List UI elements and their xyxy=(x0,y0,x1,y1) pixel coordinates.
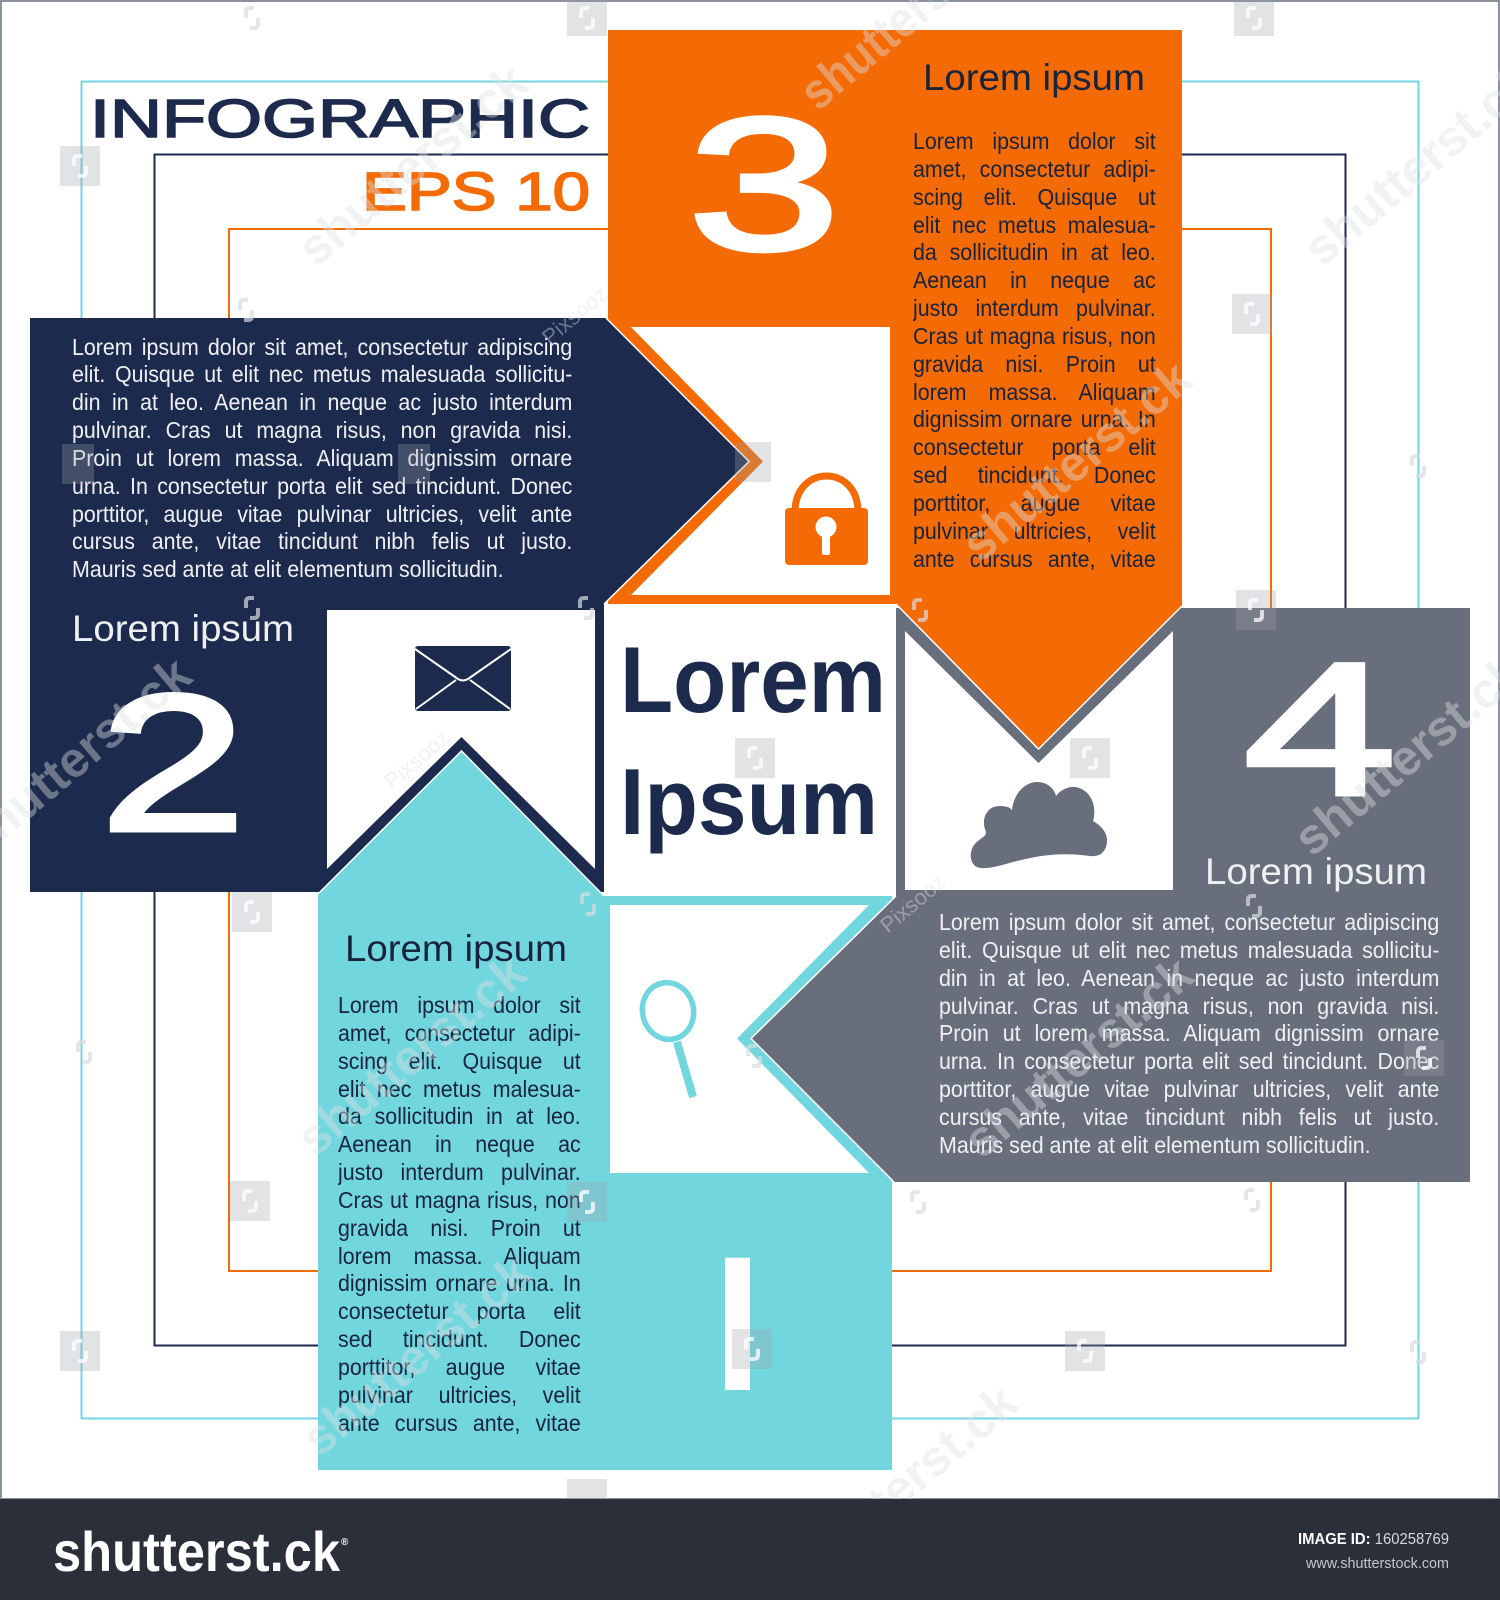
footer url: www.shutterstock.com xyxy=(1305,1555,1449,1572)
footer logo: shutterst.ck xyxy=(53,1520,341,1583)
text block: step 1: dignissim ornare urna. In xyxy=(338,1270,581,1296)
number 1: 1 xyxy=(679,1219,785,1431)
text block: step 3: justo interdum pulvinar. xyxy=(913,295,1156,321)
text block: step 3: scing elit. Quisque ut xyxy=(913,184,1156,210)
stock watermark overlay: shutterst.ck xyxy=(951,349,1202,572)
title xyxy=(90,89,590,222)
text block: step 1: porttitor, augue vitae xyxy=(338,1354,581,1380)
text block: step 3: ante cursus ante, vitae xyxy=(913,546,1156,572)
text block: step 3: elit nec metus malesua- xyxy=(913,212,1156,238)
text block: step 1: justo interdum pulvinar. xyxy=(338,1159,581,1185)
text block: step 1: amet, consectetur adipi- xyxy=(338,1020,581,1046)
panel: cyan step 1 body xyxy=(318,896,892,1470)
text block: step 2: porttitor, augue vitae pulvinar ultricies, velit ante xyxy=(72,501,572,527)
heading: centre title: Ipsum xyxy=(620,749,878,854)
heading: centre title xyxy=(620,627,886,854)
text block: step 3: Aenean in neque ac xyxy=(913,267,1156,293)
panel: orange step 3 body xyxy=(608,30,1182,604)
text block: step 2 xyxy=(72,334,572,582)
text block: step 1: ante cursus ante, vitae xyxy=(338,1410,581,1436)
text block: step 4: porttitor, augue vitae pulvinar ultricies, velit ante xyxy=(938,1076,1439,1102)
number 3: 3 xyxy=(688,79,840,289)
text block: step 1: elit nec metus malesua- xyxy=(338,1076,581,1102)
text block: step 4: pulvinar. Cras ut magna risus, non gravida nisi. xyxy=(938,993,1439,1019)
number 2: 2 xyxy=(100,655,246,872)
number 4: 4 xyxy=(1244,624,1396,834)
text block: step 2: din in at leo. Aenean in neque ac justo interdum xyxy=(72,389,572,415)
text block: step 3: Cras ut magna risus, non xyxy=(913,323,1156,349)
text block: step 2: Lorem ipsum dolor sit amet, consectetur adipiscing xyxy=(72,334,572,360)
text block: step 1: pulvinar ultricies, velit xyxy=(338,1382,581,1408)
subtitle: EPS 10 xyxy=(362,162,590,222)
text block: step 4: Mauris sed ante at elit elementum sollicitudin. xyxy=(938,1132,1370,1158)
text block: step 3: lorem massa. Aliquam xyxy=(913,379,1156,405)
text block: step 1: consectetur porta elit xyxy=(338,1298,581,1324)
stock watermark overlay: shutterst.ck xyxy=(291,1243,542,1466)
text block: step 1: Lorem ipsum dolor sit xyxy=(338,992,581,1018)
heading: step 4: Lorem ipsum xyxy=(1205,851,1427,892)
text block: step 1: sed tincidunt. Donec xyxy=(338,1326,581,1352)
text block: step 3: consectetur porta elit xyxy=(913,434,1156,460)
text block: step 2: pulvinar. Cras ut magna risus, non gravida nisi. xyxy=(72,417,572,443)
panel: navy step 2 body xyxy=(30,318,604,892)
stock watermark overlay: Pixsooz xyxy=(875,869,950,938)
text block: step 2: Mauris sed ante at elit elementum sollicitudin. xyxy=(72,556,504,582)
panel: grey step 4 body xyxy=(896,608,1470,1182)
heading: step 1: Lorem ipsum xyxy=(345,928,567,969)
icon: cloud xyxy=(971,782,1107,868)
text block: step 4: cursus ante, vitae tincidunt nibh felis ut justo. xyxy=(938,1104,1439,1130)
text block: step 1: scing elit. Quisque ut xyxy=(338,1048,581,1074)
stock watermark overlay: shutterst.ck xyxy=(777,1373,1028,1596)
icon: envelope xyxy=(415,646,511,711)
text block: step 3: amet, consectetur adipi- xyxy=(913,156,1156,182)
text block: step 1: gravida nisi. Proin ut xyxy=(338,1215,581,1241)
icon: magnifying glass xyxy=(637,978,699,1097)
text block: step 3: da sollicitudin in at leo. xyxy=(913,239,1156,265)
footer logo: ® xyxy=(341,1537,349,1548)
text block: step 2: Proin ut lorem massa. Aliquam dignissim ornare xyxy=(72,445,572,471)
text block: step 1: Aenean in neque ac xyxy=(338,1131,581,1157)
stock watermark overlay: shutterst.ck xyxy=(286,943,537,1166)
heading: step 3: Lorem ipsum xyxy=(923,57,1145,98)
text block: step 3: pulvinar ultricies, velit xyxy=(913,518,1156,544)
text block: step 4: elit. Quisque ut elit nec metus malesuada sollicitu- xyxy=(938,937,1439,963)
text block: step 3: porttitor, augue vitae xyxy=(913,490,1156,516)
text block: step 2: urna. In consectetur porta elit sed tincidunt. Donec xyxy=(72,473,572,499)
text block: step 1 xyxy=(338,992,581,1436)
text block: step 4: Lorem ipsum dolor sit amet, consectetur adipiscing xyxy=(938,909,1439,935)
text block: step 4: din in at leo. Aenean in neque ac justo interdum xyxy=(938,965,1439,991)
text block: step 4 xyxy=(938,909,1439,1158)
stock watermark overlay: shutterst.ck xyxy=(953,945,1204,1168)
text block: step 3: Lorem ipsum dolor sit xyxy=(913,128,1156,154)
text block: step 1: lorem massa. Aliquam xyxy=(338,1243,581,1269)
heading: centre title: Lorem xyxy=(620,627,886,732)
text block: step 1: da sollicitudin in at leo. xyxy=(338,1103,581,1129)
stock watermark overlay: Pixsooz xyxy=(537,281,612,350)
text block: step 3: dignissim ornare urna. In xyxy=(913,406,1156,432)
title: INFOGRAPHIC xyxy=(90,89,590,149)
heading: step 2: Lorem ipsum xyxy=(72,608,294,649)
text block: step 3 xyxy=(913,128,1156,572)
text block: step 2: elit. Quisque ut elit nec metus malesuada sollicitu- xyxy=(72,361,572,387)
text block: step 3: sed tincidunt. Donec xyxy=(913,462,1156,488)
icon: padlock xyxy=(785,476,868,565)
arrow: navy pointing right xyxy=(590,318,749,604)
arrow: orange pointing down xyxy=(896,590,1182,749)
footer image id: IMAGE ID: 160258769 xyxy=(1298,1531,1449,1548)
stock watermark overlay: shutterst.ck xyxy=(287,53,538,276)
arrow: grey pointing left xyxy=(751,896,910,1182)
footer bar xyxy=(0,1499,1500,1600)
text block: step 4: Proin ut lorem massa. Aliquam dignissim ornare xyxy=(938,1020,1439,1046)
arrow: cyan pointing up xyxy=(318,751,604,910)
text block: step 1: Cras ut magna risus, non xyxy=(338,1187,581,1213)
text block: step 3: gravida nisi. Proin ut xyxy=(913,351,1156,377)
text block: step 4: urna. In consectetur porta elit sed tincidunt. Donec xyxy=(938,1048,1439,1074)
text block: step 2: cursus ante, vitae tincidunt nibh felis ut justo. xyxy=(72,528,572,554)
stock watermark overlay: Pixsooz xyxy=(379,725,454,794)
